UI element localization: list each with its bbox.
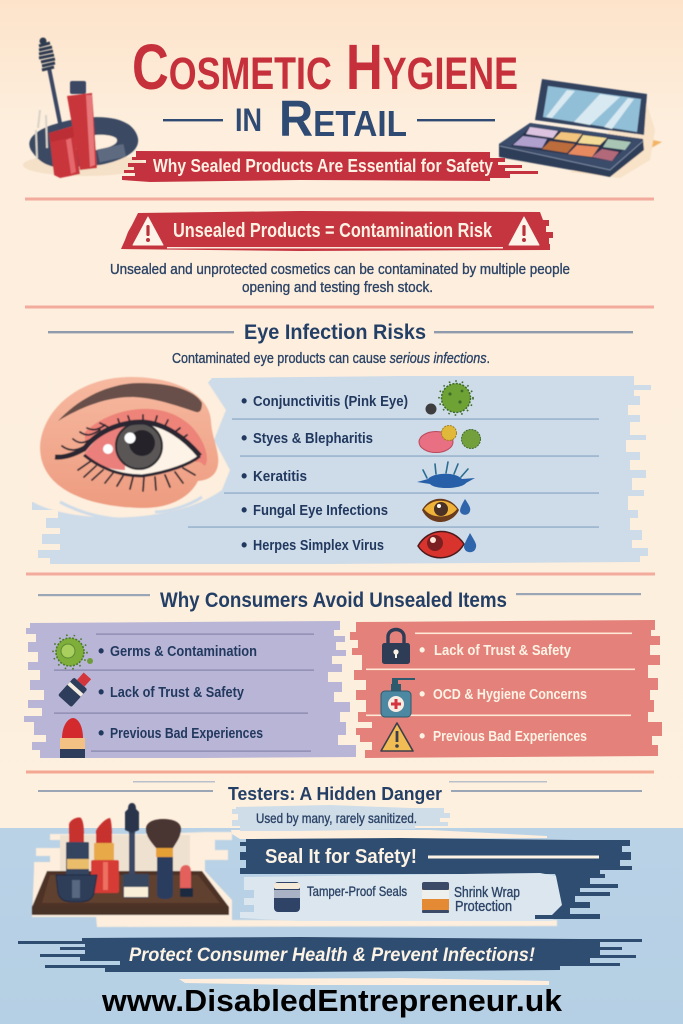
testers note bbox=[232, 805, 450, 831]
illustration: eyeshadow palette bbox=[499, 79, 662, 178]
subtitle banner: Why Sealed Products Are Essential for Safety bbox=[153, 156, 493, 176]
row: herpes bbox=[241, 531, 476, 558]
panel: seal it for safety bbox=[240, 838, 632, 921]
divider bbox=[25, 306, 654, 308]
section heading: testers: Testers: A Hidden Danger bbox=[228, 783, 442, 804]
illustration: mascara and bracelet bbox=[23, 38, 147, 178]
row: previous bad experiences bbox=[60, 718, 263, 758]
website url: www.DisabledEntrepreneur.uk bbox=[101, 983, 563, 1018]
row: keratitis bbox=[241, 462, 475, 488]
icon: germ bbox=[53, 635, 93, 669]
row: keratitis: Keratitis bbox=[253, 468, 307, 485]
row: herpes: • bbox=[241, 535, 247, 555]
icon: sanitizer bottle bbox=[381, 678, 415, 717]
row: lack of trust: Lack of Trust & Safety bbox=[110, 685, 244, 701]
rules bbox=[366, 632, 635, 716]
icon: lipstick bbox=[60, 718, 85, 758]
row: germs: Germs & Contamination bbox=[110, 644, 257, 660]
section heading: why consumers avoid: Why Consumers Avoid Unsealed Items bbox=[160, 589, 507, 612]
row: previous bad experiences: • bbox=[419, 726, 425, 746]
row: styes: • bbox=[241, 428, 247, 448]
title bbox=[132, 31, 518, 147]
footer banner bbox=[18, 937, 642, 972]
row: lack of trust: • bbox=[419, 640, 425, 660]
testers note: Used by many, rarely sanitized. bbox=[256, 810, 417, 826]
row: conjunctivitis bbox=[241, 381, 473, 415]
divider bbox=[26, 770, 654, 774]
seal item: shrink wrap: Shrink Wrap bbox=[454, 884, 520, 901]
title: Cosmetic Hygiene bbox=[132, 31, 518, 103]
illustration: testers tray bbox=[32, 803, 557, 927]
rules bbox=[54, 634, 314, 752]
divider bbox=[25, 198, 654, 200]
warning banner bbox=[121, 211, 553, 251]
row: fungal: Fungal Eye Infections bbox=[253, 502, 388, 519]
row: previous bad experiences: Previous Bad Experiences bbox=[110, 726, 263, 742]
row rules bbox=[188, 418, 599, 528]
icon: navy jar bbox=[274, 882, 300, 912]
row: keratitis: • bbox=[241, 466, 247, 486]
icon: herpes eye bbox=[418, 531, 476, 558]
row: herpes: Herpes Simplex Virus bbox=[253, 537, 384, 554]
panel: eye infection risks bbox=[30, 376, 651, 564]
row: previous bad experiences bbox=[381, 723, 587, 751]
subtitle banner bbox=[122, 151, 538, 182]
warning banner: Unsealed Products = Contamination Risk bbox=[173, 220, 493, 242]
row: OCD bbox=[381, 678, 587, 717]
icon: keratitis blob bbox=[417, 462, 475, 488]
title line two bbox=[163, 89, 495, 147]
title line two: Retail bbox=[279, 90, 407, 147]
intro text bbox=[110, 261, 570, 296]
divider bbox=[26, 572, 655, 576]
eye illustration bbox=[30, 377, 230, 519]
row: OCD: • bbox=[419, 684, 425, 704]
row: conjunctivitis: • bbox=[241, 391, 247, 411]
footer banner: Protect Consumer Health & Prevent Infections! bbox=[129, 945, 535, 966]
row: germs bbox=[53, 635, 257, 669]
seal item: shrink wrap bbox=[422, 882, 520, 915]
row: styes: Styes & Blepharitis bbox=[253, 430, 373, 447]
row: lack of trust: • bbox=[98, 682, 104, 702]
title line two: in bbox=[235, 89, 262, 141]
seal item: shrink wrap: Protection bbox=[455, 898, 512, 915]
icon: padlock bbox=[382, 630, 410, 664]
panel: seal it for safety: Seal It for Safety! bbox=[265, 846, 417, 868]
panel: red reasons bbox=[350, 620, 662, 758]
eye risks subtitle: Contaminated eye products can cause serious infections. bbox=[172, 350, 490, 367]
row: germs: • bbox=[98, 641, 104, 661]
intro text: opening and testing fresh stock. bbox=[242, 279, 433, 296]
icon: stye germs bbox=[419, 426, 480, 452]
icon: warning left bbox=[133, 217, 163, 245]
intro text: Unsealed and unprotected cosmetics can be contaminated by multiple people bbox=[110, 261, 570, 278]
row: previous bad experiences: • bbox=[98, 723, 104, 743]
row: conjunctivitis: Conjunctivitis (Pink Eye) bbox=[253, 393, 408, 410]
row: previous bad experiences: Previous Bad Experiences bbox=[433, 729, 587, 745]
icon: orange jar bbox=[422, 882, 449, 913]
row: fungal bbox=[241, 499, 470, 522]
section heading: eye infection risks: Eye Infection Risks bbox=[244, 321, 426, 344]
row: lack of trust bbox=[58, 670, 244, 707]
row: lack of trust bbox=[382, 630, 571, 664]
panel: purple reasons bbox=[24, 621, 356, 758]
seal item: tamper-proof bbox=[274, 882, 407, 912]
row: fungal: • bbox=[241, 500, 247, 520]
cream streak under testers note bbox=[231, 830, 547, 839]
cream streak bbox=[179, 978, 549, 985]
icon: broken tube bbox=[58, 670, 94, 707]
icon: green virus bbox=[426, 381, 473, 415]
icon: warning right bbox=[509, 217, 539, 245]
icon: fungal eye bbox=[422, 499, 470, 522]
row: lack of trust: Lack of Trust & Safety bbox=[434, 643, 571, 659]
row: OCD: OCD & Hygiene Concerns bbox=[433, 687, 587, 703]
seal item: tamper-proof: Tamper-Proof Seals bbox=[307, 883, 407, 899]
row: styes bbox=[241, 426, 480, 452]
icon: warning triangle bbox=[381, 723, 413, 751]
